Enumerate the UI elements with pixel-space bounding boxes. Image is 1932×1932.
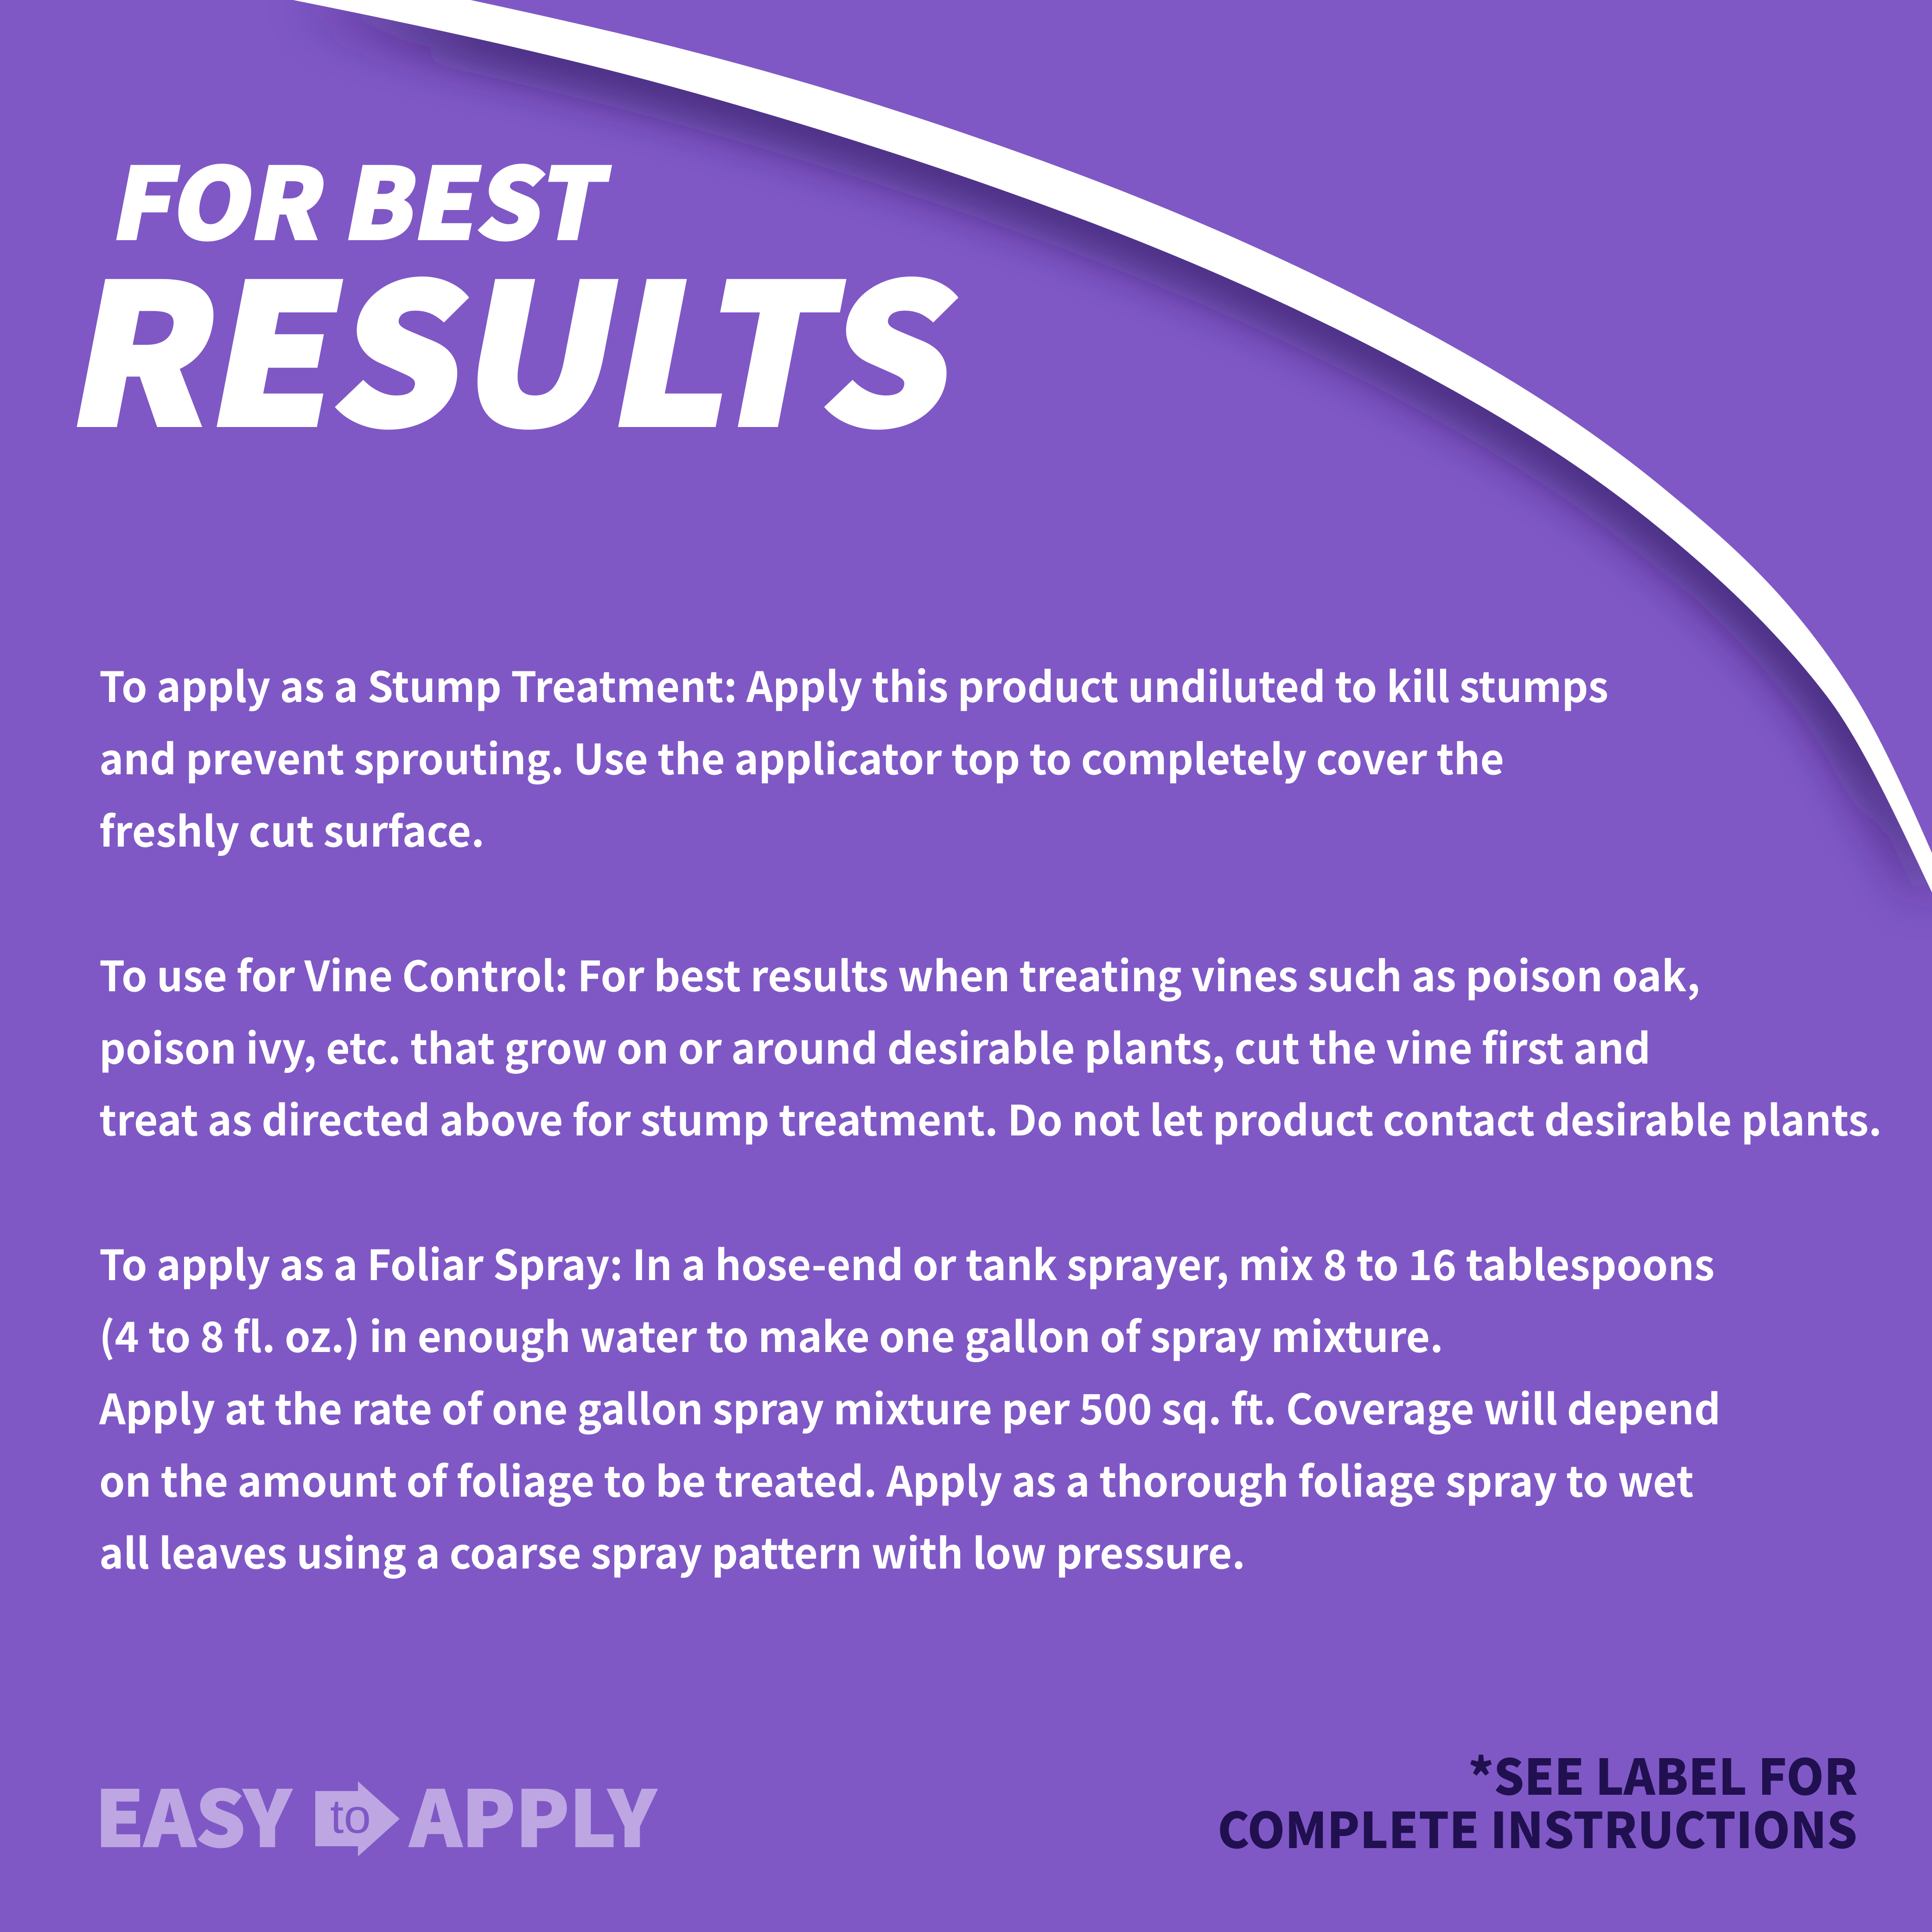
text block: application instructions	[99, 654, 1882, 1581]
note: see label for complete instructions: *SEE LABEL FOR	[1468, 1738, 1858, 1809]
paragraph: stump treatment: and prevent sprouting. Use the applicator top to completely cover the	[99, 726, 1504, 786]
logo word: to: to	[330, 1790, 371, 1843]
curved band shadow	[293, 0, 1932, 893]
paragraph: foliar spray: all leaves using a coarse spray pattern with low pressure.	[99, 1520, 1245, 1581]
logo word: easy: EASY	[95, 1758, 292, 1868]
title: for best results	[52, 126, 986, 480]
paragraph: foliar spray: To apply as a Foliar Spray: In a hose-end or tank sprayer, mix 8 to 16 tablespoons	[99, 1232, 1715, 1292]
paragraph: stump treatment: To apply as a Stump Treatment: Apply this product undiluted to kill stumps	[99, 654, 1608, 714]
paragraph: stump treatment	[99, 654, 1608, 859]
note: see label for complete instructions: COMPLETE INSTRUCTIONS	[1218, 1791, 1857, 1862]
paragraph: foliar spray: (4 to 8 fl. oz.) in enough water to make one gallon of spray mixture.	[99, 1304, 1443, 1364]
note: see label for complete instructions	[1218, 1738, 1858, 1862]
logo word: apply: APPLY	[409, 1758, 657, 1868]
paragraph: vine control	[99, 943, 1882, 1148]
heading: for best: FOR BEST	[103, 126, 621, 268]
paragraph: vine control: poison ivy, etc. that grow on or around desirable plants, cut the vine first and	[99, 1015, 1651, 1076]
icon: arrow	[315, 1781, 400, 1856]
paragraph: vine control: treat as directed above for stump treatment. Do not let product contact desirable plants.	[99, 1087, 1882, 1148]
paragraph: foliar spray: on the amount of foliage to be treated. Apply as a thorough foliage spray to wet	[99, 1448, 1694, 1509]
paragraph: foliar spray	[99, 1232, 1721, 1581]
paragraph: foliar spray: Apply at the rate of one gallon spray mixture per 500 sq. ft. Coverage will depend	[99, 1376, 1721, 1436]
paragraph: stump treatment: freshly cut surface.	[99, 798, 485, 859]
paragraph: vine control: To use for Vine Control: For best results when treating vines such as poison oak,	[99, 943, 1700, 1003]
logo: easy to apply	[95, 1758, 657, 1868]
curved white band	[293, 0, 1932, 893]
heading: results: RESULTS	[52, 201, 986, 480]
